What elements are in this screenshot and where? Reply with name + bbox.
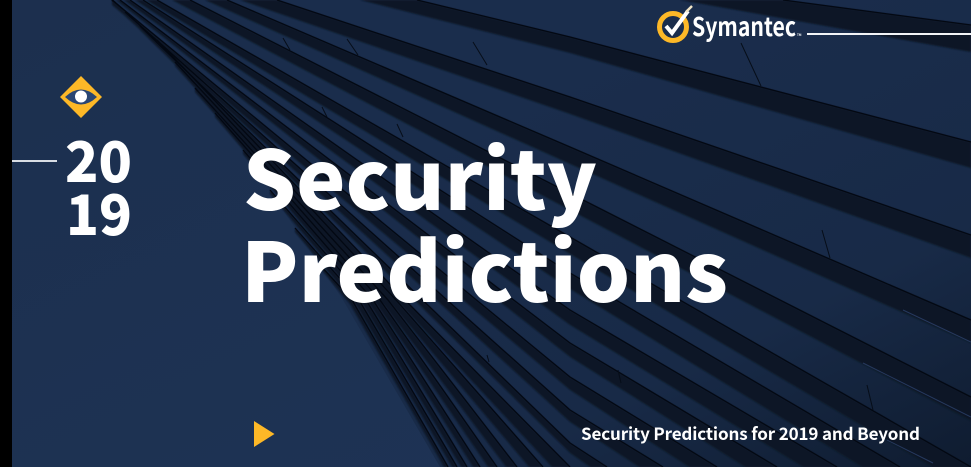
Symantec logo (660, 6, 802, 44)
Symantec logo: TM (797, 33, 802, 37)
year 2019: 19 (66, 171, 132, 252)
year 2019 (65, 118, 132, 252)
footer caption: Security Predictions for 2019 and Beyond (581, 420, 920, 445)
title: Predictions (241, 207, 728, 326)
icon: play triangle (254, 421, 274, 447)
left black bar (0, 0, 12, 467)
divider: year rule (12, 160, 57, 162)
top-right rule (807, 33, 971, 35)
year 2019: 20 (65, 118, 132, 199)
title: Security (243, 115, 597, 234)
title (241, 115, 728, 326)
Symantec logo: Symantec (692, 7, 796, 44)
icon: diamond eye (60, 76, 102, 118)
